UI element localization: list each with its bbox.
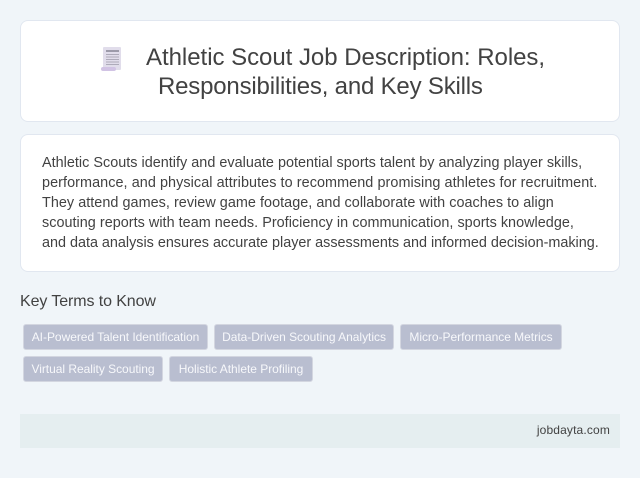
description text bbox=[42, 155, 599, 251]
tag: Micro-Performance Metrics bbox=[400, 324, 562, 350]
tag: Holistic Athlete Profiling: Holistic Athlete Profiling bbox=[179, 362, 303, 376]
tag: Micro-Performance Metrics: Micro-Performance Metrics bbox=[409, 330, 553, 344]
panel: description bbox=[20, 134, 620, 272]
description text: scouting reports with team needs. Proficiency in communication, sports knowledge, bbox=[42, 215, 574, 231]
description text: and data analysis ensures accurate player assessments and informed decision-making. bbox=[42, 235, 599, 251]
footer source text: jobdayta.com bbox=[537, 423, 610, 437]
tag: AI-Powered Talent Identification bbox=[23, 324, 208, 350]
header panel bbox=[20, 20, 620, 122]
title: Responsibilities, and Key Skills bbox=[158, 73, 483, 100]
title bbox=[146, 44, 545, 100]
tags bbox=[23, 324, 562, 382]
title: Athletic Scout Job Description: Roles, bbox=[146, 44, 545, 71]
icon: document scroll bbox=[101, 47, 121, 71]
tag: Virtual Reality Scouting bbox=[23, 356, 163, 382]
tag: Data-Driven Scouting Analytics: Data-Driven Scouting Analytics bbox=[222, 330, 386, 344]
description text: performance, and physical attributes to recommend promising athletes for recruitment. bbox=[42, 175, 597, 191]
description text: They attend games, review game footage, and collaborate with coaches to align bbox=[42, 195, 554, 211]
tag: Holistic Athlete Profiling bbox=[169, 356, 313, 382]
tag: AI-Powered Talent Identification: AI-Powered Talent Identification bbox=[32, 330, 199, 344]
tag: Data-Driven Scouting Analytics bbox=[214, 324, 394, 350]
tag: Virtual Reality Scouting: Virtual Reality Scouting bbox=[31, 362, 155, 376]
footer bar bbox=[20, 414, 620, 448]
heading: key terms: Key Terms to Know bbox=[20, 293, 156, 310]
description text: Athletic Scouts identify and evaluate potential sports talent by analyzing player skills, bbox=[42, 155, 582, 171]
